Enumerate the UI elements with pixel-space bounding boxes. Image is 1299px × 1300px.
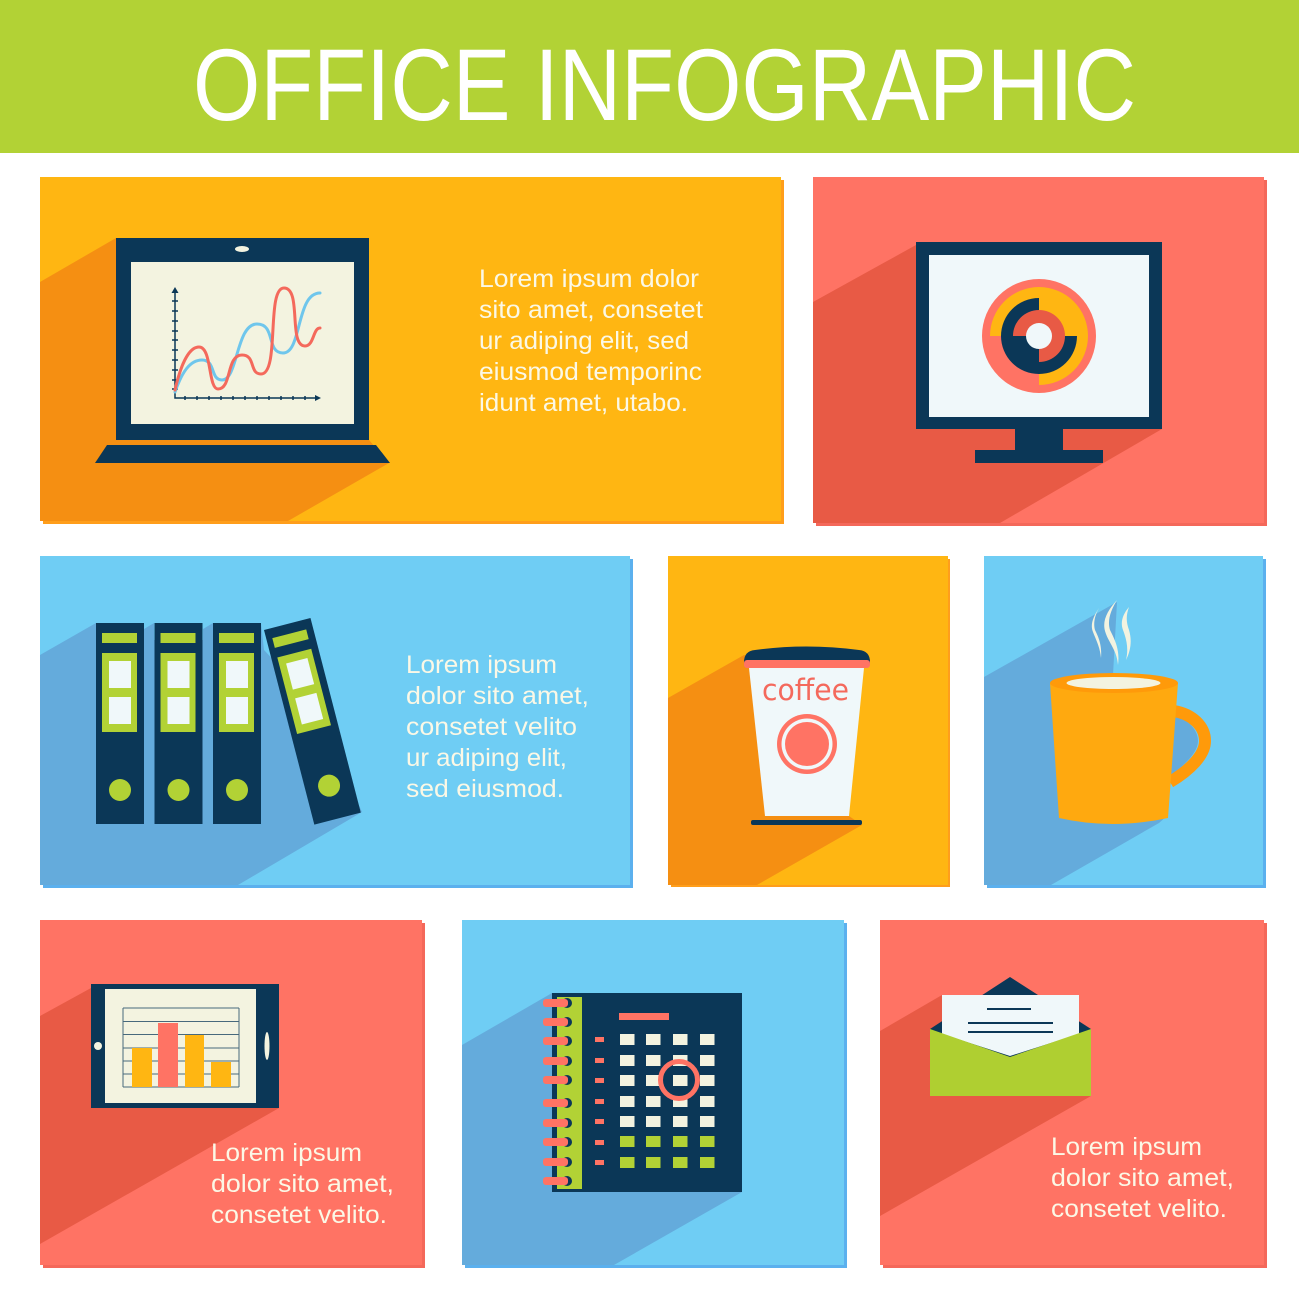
panel: binders [40, 556, 633, 888]
panel: envelope [880, 920, 1267, 1268]
icon: steam [1092, 600, 1131, 665]
text block: envelope: Lorem ipsum [1051, 1133, 1202, 1161]
text block: tablet: consetet velito. [211, 1201, 387, 1229]
icon: mug [1050, 673, 1205, 824]
text block: envelope: consetet velito. [1051, 1195, 1227, 1223]
panel: coffee cup [668, 556, 950, 887]
icon: open envelope with letter [930, 977, 1091, 1096]
text block: envelope [1051, 1133, 1234, 1223]
icon: takeaway coffee cup: coffee [762, 673, 849, 707]
text block: laptop: Lorem ipsum dolor [479, 265, 699, 293]
text block: binders: sed eiusmod. [406, 775, 564, 803]
text block: laptop: eiusmod temporinc [479, 358, 702, 386]
icon: binders [96, 618, 361, 825]
icon: spiral calendar [543, 993, 742, 1192]
text block: laptop [479, 265, 703, 417]
text block: laptop: idunt amet, utabo. [479, 389, 688, 417]
icon: laptop with line chart [95, 238, 390, 463]
panel: mug [984, 556, 1266, 888]
text block: laptop: ur adiping elit, sed [479, 327, 689, 355]
panel: tablet [40, 920, 425, 1268]
text block: envelope: dolor sito amet, [1051, 1164, 1234, 1192]
panel: calendar [462, 920, 847, 1268]
icon: monitor with radial chart [916, 242, 1162, 463]
text block: binders: Lorem ipsum [406, 651, 557, 679]
text block: binders [406, 651, 589, 803]
title: OFFICE INFOGRAPHIC [193, 28, 1136, 142]
text block: tablet: Lorem ipsum [211, 1139, 362, 1167]
text block: tablet: dolor sito amet, [211, 1170, 394, 1198]
text block: laptop: sito amet, consetet [479, 296, 703, 324]
text block: tablet [211, 1139, 394, 1229]
text block: binders: dolor sito amet, [406, 682, 589, 710]
panel: monitor [813, 177, 1267, 526]
text block: binders: ur adiping elit, [406, 744, 567, 772]
text block: binders: consetet velito [406, 713, 577, 741]
icon: takeaway coffee cup [744, 646, 870, 825]
panel: laptop [40, 177, 784, 524]
icon: tablet with bar chart [91, 984, 279, 1108]
header banner [0, 0, 1299, 153]
